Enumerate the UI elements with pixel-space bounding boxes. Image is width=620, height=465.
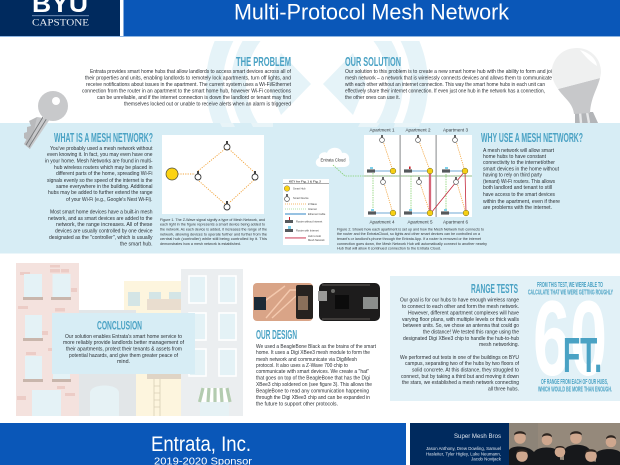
apartment labels (370, 128, 469, 224)
section: why use a mesh network: are problems with the internet. (483, 205, 552, 211)
header: title banner: Multi-Protocol Mesh Network (234, 0, 510, 24)
illustration: apartment buildings (16, 263, 243, 416)
section: what is a mesh network: network, and as smart devices are added to the (48, 216, 153, 222)
figure 2 caption: tenant's or landlord's phone through the Entrata App. If a router is removed or the internet (337, 237, 481, 241)
section: the problem: can be unreliable, and if the internet connection is down the landlord or tenant may find (97, 95, 291, 101)
legend: key for figures: Mesh Network (308, 238, 325, 242)
panel: conclusion: Our solution enables Entrata's smart home service to (65, 334, 182, 340)
section: why use a mesh network: both landlord and tenant to still (483, 185, 552, 191)
footer: team names: Jacob Novijack (471, 457, 502, 462)
panel: range tests: varying floor plans, with multiple levels or thick walls (402, 317, 519, 323)
section: our design: BeagleBone to read any communication happening (256, 388, 369, 394)
section: our design: protocol. It also uses a Z-Wave 700 chip to (256, 363, 348, 369)
panel: range tests: designated Digi XBee3 chip to handle the hub-to-hub (403, 336, 519, 342)
section: what is a mesh network: signals evenly so the speed of the internet is the (47, 178, 153, 184)
section: our design (256, 327, 376, 408)
section: what is a mesh network: You've probably used a mesh network without (50, 146, 153, 152)
panel: range tests: to connect to each other and form the mesh network. (402, 304, 519, 310)
section: why use a mesh network (481, 130, 583, 211)
figure 2 caption: the router and the EntrataCloud, so lights and other smart devices can be controlled on a (337, 232, 480, 236)
photo: copper hat circuit board (253, 283, 313, 321)
panel: range tests: mesh networking. (479, 342, 519, 348)
apartment labels: Apartment 2 (406, 128, 431, 132)
panel: range tests: campus, separating two of the hubs by two floors of (405, 361, 519, 367)
section: what is a mesh network: hubs may be added to further extend the range (48, 190, 153, 196)
section: our design: that goes on top of the BeagleBone that has the Digi (256, 376, 370, 382)
legend: key for figures: Hub to Hub (308, 234, 322, 238)
section: our design: OUR DESIGN (256, 327, 297, 342)
legend: key for figures: Internet (308, 207, 317, 211)
building: grey right (181, 269, 243, 416)
section: what is a mesh network: hub wireless routers which may be placed in (54, 165, 153, 171)
panel: range tests: RANGE TESTS (471, 281, 518, 296)
section: why use a mesh network: have access to the smart devices (483, 192, 555, 198)
figure 1 caption: each light in the figure represents a smart device being added to (160, 223, 265, 227)
section: why use a mesh network: connectivity to the internet/other (483, 160, 555, 166)
section: what is a mesh network (45, 130, 153, 248)
background watermark: wireless signal (206, 41, 428, 123)
footer: team names: Jason Anthony, Drew Dowling, Samuel (426, 446, 501, 451)
panel: range tests: between units. So, we chose an antenna that could go (403, 323, 519, 329)
section: our solution: mesh network – a network that is wirelessly connects devices and allows them to communicate (345, 76, 552, 82)
section: what is a mesh network: designated as the "controller", which is usually (49, 235, 153, 241)
legend: key for figures: Smart Hub (293, 186, 306, 190)
footer: team photo (509, 423, 620, 465)
panel: light blue band (0, 123, 620, 254)
section: why use a mesh network: (tenant) Wi-Fi routers. This allows (483, 179, 555, 185)
header rule (0, 36, 620, 37)
section: what is a mesh network: in your home. Mesh Networks are found in multi- (45, 158, 153, 164)
section: our solution: effectively share their internet connection. If even just one hub in the network has a connection, (345, 88, 545, 94)
section: why use a mesh network: having to rely on third party (483, 172, 542, 178)
section: why use a mesh network: smart devices in the home without (483, 166, 559, 172)
panel: range tests: Our goal is for our hubs to have enough wireless range (400, 298, 519, 304)
section: the problem: themselves locked out or unable to receive alerts when an alarm is triggered (124, 102, 291, 108)
legend: key for figures: Z-Wave (308, 202, 318, 206)
section: the problem: Entrata provides smart home hubs that allow landlords to access smart devices across all of (90, 69, 291, 75)
panel: range tests: all three hubs. (488, 386, 519, 392)
figure 2 caption (337, 228, 487, 250)
panel: conclusion: their apartments, protect their tenants & assets from (66, 347, 183, 353)
footer: team names (410, 423, 509, 465)
section: what is a mesh network: the smart hub. (120, 242, 152, 248)
band watermark stripes (220, 123, 420, 127)
apartment labels: Apartment 1 (370, 128, 395, 132)
section: why use a mesh network: within the apartment, even if there (483, 199, 560, 205)
apartment labels: Apartment 5 (408, 220, 433, 224)
section: our solution: with each other without an internet connection. This way the smart home hubs in each unit can (345, 82, 545, 88)
section: our design: XBee3 chip soldered on (see figure 3). This allows the (256, 382, 372, 388)
section: our design: mesh network and communicate via DigiMesh (256, 357, 357, 363)
footer: team names: Hasleiter, Tyler Higley, Luke Neumann, (426, 452, 501, 456)
icon: light bulb (552, 48, 601, 123)
section: what is a mesh network: WHAT IS A MESH NETWORK? (54, 130, 153, 145)
section: the problem (82, 54, 291, 108)
section: our solution: Our solution to this problem is to create a new smart home hub with the ability to form and join a (345, 69, 559, 75)
figure 2 caption: Figure 2. Shows how each apartment is set up and how the Mesh Network hub connects to (337, 228, 484, 232)
section: our design: home. It uses a Digi XBee3 mesh module to form the (256, 350, 370, 356)
icon: Entrata cloud: Entrata Cloud (320, 158, 346, 162)
panel: range tests: connect, but by taking a third but and moving it down (401, 374, 519, 380)
header: title banner (124, 0, 620, 36)
mesh links (429, 171, 431, 213)
internet links (333, 165, 472, 211)
header: BYU Capstone logo (0, 0, 120, 36)
section: the problem: receive notifications about issues in the apartment. The current system uses a Wi-Fi/Ethernet (86, 82, 291, 88)
section: our design: the future to support other protocols. (256, 402, 338, 408)
icon: Entrata cloud (316, 148, 350, 167)
devices (380, 135, 384, 142)
legend: key for figures: Ethernet Cable (308, 212, 326, 216)
panel: range tests (390, 276, 620, 401)
panel: range tests: We performed out tests in one of the buildings on BYU (400, 355, 519, 361)
section: our solution: the other ones can use it. (345, 95, 400, 101)
legend: key for figures: Router without Internet (296, 220, 323, 224)
section: what is a mesh network: different parts of the home, spreading Wi-Fi (56, 171, 152, 177)
panel: conclusion: CONCLUSION (97, 320, 142, 332)
panel: range tests: the stars, we established a mesh network connecting (402, 380, 519, 386)
figure 1 caption: demonstrates how a mesh network is established. (160, 242, 241, 246)
header: BYU Capstone logo: CAPSTONE (32, 19, 89, 29)
panel: range tests: the distance! We tested this range using the (423, 330, 519, 336)
legend: key for figures: KEY for Fig. 1 & Fig. 2 (289, 180, 321, 184)
section: what is a mesh network: of your Wi-Fi (e.g., Google's Nest Wi-Fi). (66, 197, 152, 203)
footer: sponsor (0, 423, 406, 465)
section: the problem: connection from the router in an apartment to the smart home hub, however Wi-Fi connections (82, 88, 291, 94)
figure 1 caption: network, allowing devices to operate further and further from the (160, 232, 267, 236)
building: yellow (124, 281, 181, 416)
legend: key for figures (283, 179, 329, 245)
panel: conclusion (52, 313, 195, 374)
section: our design: through the Digi XBee3 chip and can be expanded in (256, 395, 370, 401)
footer: team names: Super Mesh Bros (454, 433, 502, 440)
figure 1 caption: central hub (controller) while still being controlled by it. This (160, 237, 267, 241)
figure 2 caption: Hub that will allow it continued connection to the Entrata Cloud. (337, 246, 441, 250)
apartment labels: Apartment 3 (443, 128, 469, 132)
section: what is a mesh network: devices are usually controlled by one device (55, 228, 153, 234)
figure 1: mesh growth diagram (162, 135, 264, 214)
photo: BeagleBone Black board (318, 283, 380, 321)
ethernet links (374, 171, 464, 213)
section: the problem: their properties and units, enabling landlords to remotely lock apartments, turn off lights, and (85, 76, 291, 82)
section: what is a mesh network: even knowing it. In fact, you may even have one (47, 152, 153, 158)
building: pink brick (16, 263, 79, 416)
figure 2 caption: connection goes down, the Mesh Network Hub will automatically connect to another nearby (337, 242, 487, 246)
panel: range tests: However, different apartment complexes will have (408, 310, 519, 316)
section: the problem: THE PROBLEM (236, 54, 291, 69)
panel: conclusion: mind. (117, 359, 130, 365)
section: why use a mesh network: A mesh network will allow smart (483, 148, 554, 154)
building: grey centre (79, 310, 136, 416)
figure 1 caption: Figure 1. The Z-Wave signal signify a type of Mesh Network, and (160, 218, 265, 222)
panel: range tests: solid concrete. At this distance, they struggled to (412, 368, 519, 374)
section: our solution: OUR SOLUTION (345, 54, 401, 69)
section: what is a mesh network: Most smart home devices have a built-in mesh (50, 210, 153, 216)
icon: key (24, 91, 68, 149)
figure 1 caption (160, 218, 267, 246)
figure 1 caption: the network. As each device is added, it increases the range of the (160, 227, 267, 231)
section: our solution (345, 54, 559, 101)
section: what is a mesh network: same everywhere in the building. Additional (56, 184, 152, 190)
apartment labels: Apartment 4 (370, 220, 395, 224)
section: why use a mesh network: home hubs to have constant (483, 154, 546, 160)
section: what is a mesh network: network, the range increases. All of these (56, 222, 153, 228)
panel: conclusion: potential hazards, and give them greater peace of (69, 353, 178, 359)
section: our design: We used a BeagleBone Black as the brains of the smart (256, 344, 376, 350)
figure 2: apartment network diagram (333, 128, 472, 224)
footer: sponsor: Entrata, Inc. (151, 433, 251, 456)
legend: key for figures: Smart Device (293, 196, 309, 200)
apartment labels: Apartment 6 (443, 220, 469, 224)
Z-Wave links (383, 141, 465, 210)
panel: conclusion: more reliably provide landlords better management of (63, 340, 184, 346)
section: our design: communicate with smart devices. We create a "hat" (256, 369, 369, 375)
legend: key for figures: Router with Internet (296, 228, 319, 232)
